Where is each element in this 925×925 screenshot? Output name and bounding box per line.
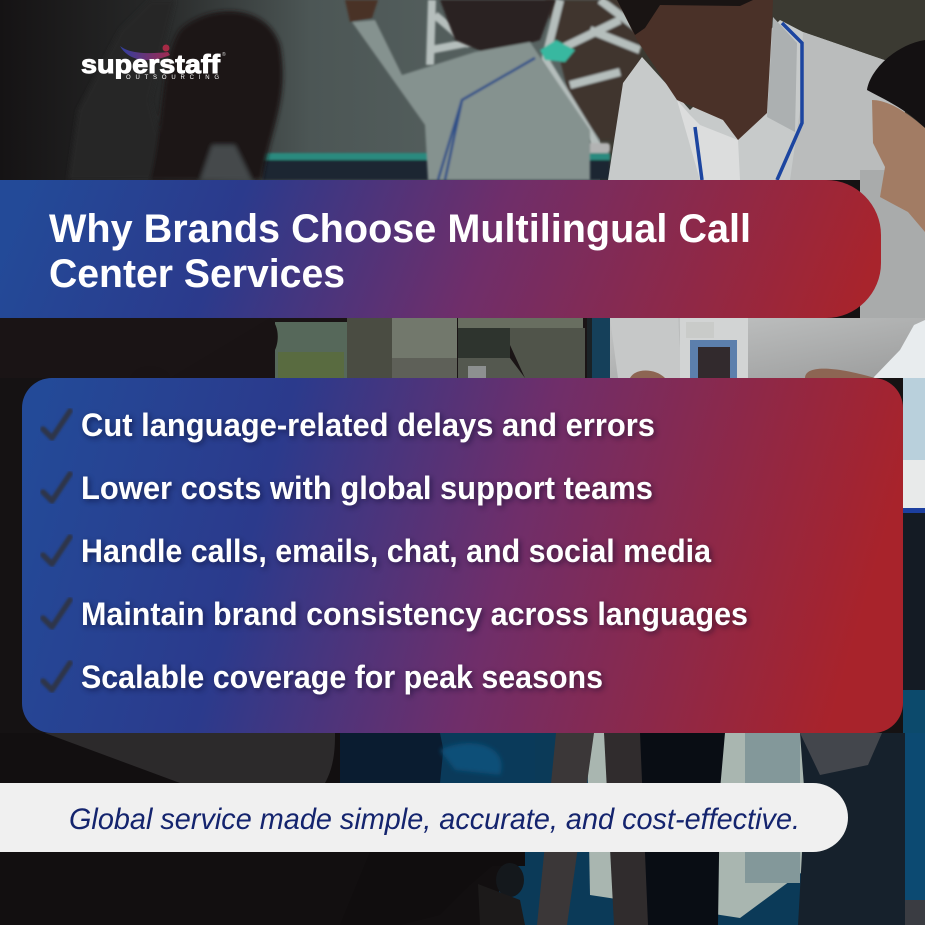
woman at right: hair [867, 40, 925, 128]
icon: check 5 [43, 663, 70, 690]
text 5: Scalable coverage for peak seasons [81, 659, 603, 695]
right edge: sleeve, shirt hem and jeans [903, 378, 925, 735]
list item 2 [43, 470, 655, 508]
logo wordmark: superstaff [81, 49, 220, 79]
logo registered mark: ® [222, 51, 226, 58]
text 4: Maintain brand consistency across languages [81, 596, 748, 632]
text 2: Lower costs with global support teams [81, 470, 653, 506]
logo tagline: OUTSOURCING [126, 75, 219, 81]
logo dot [162, 44, 170, 52]
woman at right: face [872, 100, 925, 232]
text 3: Handle calls, emails, chat, and social media [81, 533, 711, 569]
panel: tagline bar [0, 783, 848, 852]
text shadow 5: Scalable coverage for peak seasons [83, 661, 605, 697]
icon: check 1 [43, 411, 70, 438]
lower area: cabinet, table legs, jeans [537, 733, 925, 925]
icon: check 2 [43, 474, 70, 501]
chair base [340, 852, 525, 925]
background screen with white lines [262, 0, 640, 180]
background figure: woman with dark hair [68, 0, 283, 180]
text 1: Cut language-related delays and errors [81, 407, 655, 443]
title: Center Services [49, 252, 345, 296]
list item 4 [43, 596, 750, 634]
woman shirt beside banner [860, 170, 925, 330]
text shadow 4: Maintain brand consistency across languages [83, 598, 750, 634]
logo swoosh [120, 46, 170, 60]
tagline: Global service made simple, accurate, and cost-effective. [69, 803, 800, 836]
list item 1 [43, 407, 657, 445]
man collar [767, 17, 797, 132]
icon: check 3 [43, 537, 70, 564]
title: Why Brands Choose Multilingual Call [49, 207, 751, 251]
background figure: man in white shirt at screen [345, 0, 590, 180]
lower area: floor, person and chair [0, 733, 925, 925]
title [49, 207, 751, 296]
logo: superstaff outsourcing [81, 44, 226, 81]
text shadow 1: Cut language-related delays and errors [83, 409, 657, 445]
list item 3 [43, 533, 713, 571]
text shadow 3: Handle calls, emails, chat, and social media [83, 535, 713, 571]
lower band: shirt, badge and hands [610, 318, 925, 378]
panel: benefits list [22, 378, 903, 733]
text shadow 2: Lower costs with global support teams [83, 472, 655, 508]
man lanyard [695, 23, 802, 180]
icon: check 4 [43, 600, 70, 627]
list item 5 [43, 659, 605, 697]
panel: title banner [0, 180, 881, 318]
foreground man in white shirt [608, 0, 925, 180]
lower band: background screen [0, 318, 612, 378]
